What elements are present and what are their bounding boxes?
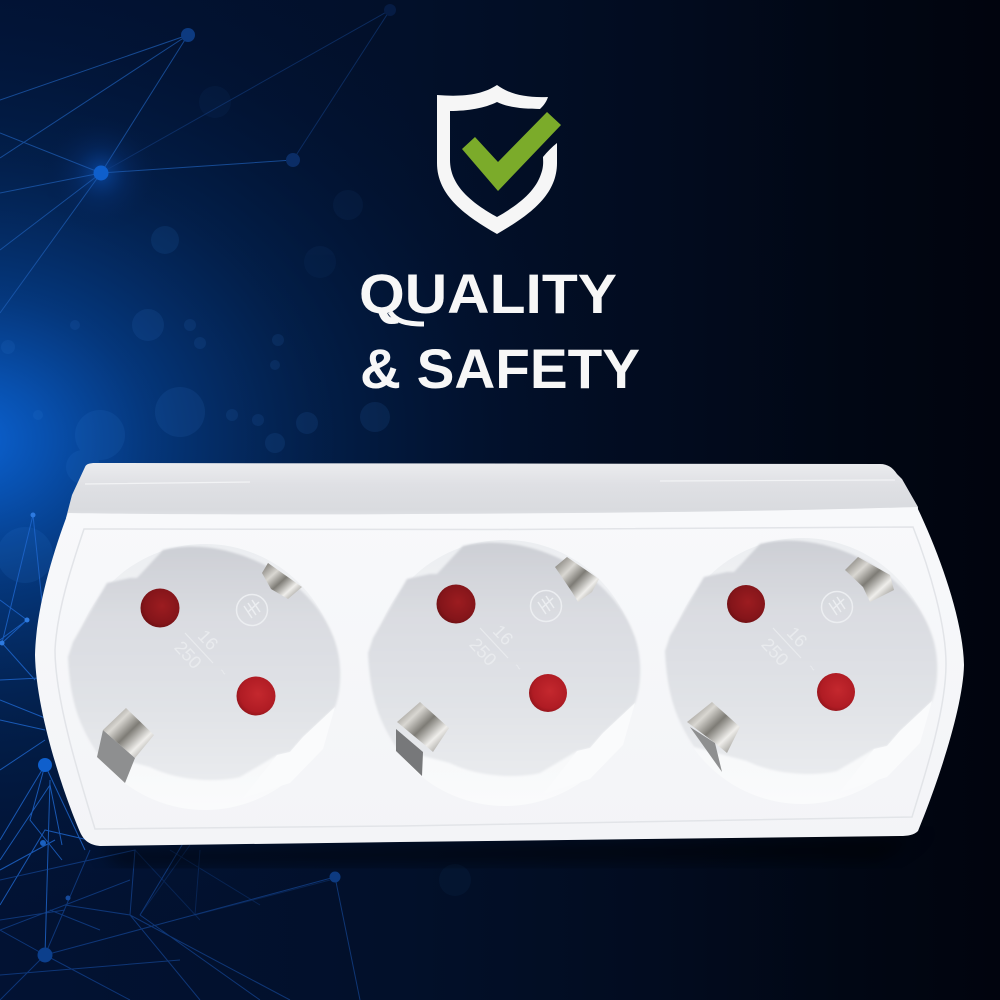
red contact holes bbox=[436, 584, 476, 624]
rating marks: 16 bbox=[489, 621, 517, 649]
top band of housing bbox=[66, 463, 918, 518]
green check mark bbox=[462, 112, 561, 191]
rating marks bbox=[757, 623, 820, 675]
earth symbol bbox=[530, 590, 562, 622]
rating marks: ~ bbox=[510, 660, 526, 674]
network lines lower-left bbox=[0, 512, 360, 1000]
rating marks: 250 bbox=[757, 634, 793, 670]
lower earth clip bbox=[396, 702, 449, 776]
title line: QUALITY: QUALITY bbox=[359, 262, 617, 325]
rating marks: 16 bbox=[194, 626, 222, 654]
lower earth clip bbox=[97, 708, 154, 783]
earth symbol bbox=[236, 594, 268, 626]
socket recess bbox=[72, 544, 338, 810]
upper earth clip bbox=[845, 557, 894, 602]
rating marks: 250 bbox=[170, 637, 206, 673]
icon: shield with green check bbox=[437, 85, 561, 234]
rating marks: ~ bbox=[804, 661, 820, 675]
network lines top-left bbox=[0, 4, 396, 313]
socket 1 bbox=[68, 544, 340, 810]
upper earth clip bbox=[555, 557, 599, 602]
title line: & SAFETY: & SAFETY bbox=[360, 337, 640, 400]
upper earth clip bbox=[262, 563, 302, 599]
socket 3 bbox=[665, 538, 937, 804]
rating marks bbox=[465, 621, 526, 674]
shield outline bbox=[437, 85, 557, 234]
socket tab bbox=[243, 707, 335, 798]
socket floor bbox=[368, 543, 640, 776]
title bbox=[359, 262, 640, 400]
socket tab bbox=[543, 703, 635, 794]
body shadow bbox=[100, 830, 930, 865]
socket recess bbox=[669, 538, 935, 804]
socket 2 bbox=[368, 540, 640, 806]
front face rim line bbox=[55, 527, 946, 829]
socket floor bbox=[68, 547, 340, 780]
rating marks: 16 bbox=[783, 623, 811, 651]
rating marks: ~ bbox=[215, 665, 231, 679]
product: triple socket adapter bbox=[35, 463, 964, 865]
earth symbol bbox=[822, 592, 852, 622]
rating marks: 250 bbox=[465, 634, 501, 670]
red contact holes bbox=[140, 588, 180, 628]
socket tab bbox=[840, 701, 932, 792]
red contact holes bbox=[727, 585, 765, 623]
socket recess bbox=[372, 540, 638, 806]
rating marks bbox=[170, 626, 231, 679]
socket floor bbox=[665, 541, 937, 774]
lower earth clip bbox=[687, 702, 740, 772]
front face of housing bbox=[35, 507, 964, 846]
